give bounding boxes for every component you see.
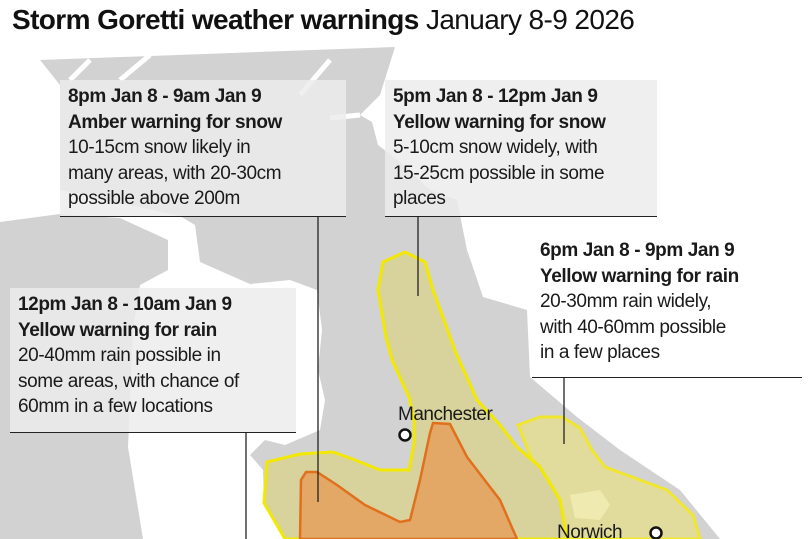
callout: amber snow: 8pm Jan 8 - 9am Jan 9 [68,86,261,107]
callout: yellow rain east: in a few places [540,342,660,363]
callout: yellow snow: 5-10cm snow widely, with [393,137,597,158]
callout: yellow rain west: Yellow warning for rain [18,320,217,340]
callout: yellow snow: places [393,188,446,209]
callout: yellow rain west: some areas, with chance of [18,370,239,392]
callout: yellow rain east [532,234,802,378]
city: Norwich [557,522,662,539]
callout: yellow rain west: 20-40mm rain possible in [18,345,221,366]
callout: yellow rain east: 20-30mm rain widely, [540,291,711,312]
title: Storm Goretti weather warnings January 8-9 2026 [12,4,634,35]
warning: yellow rain east [518,417,700,539]
callout: yellow rain east: 6pm Jan 8 - 9pm Jan 9 [540,240,734,261]
callout: yellow snow: 5pm Jan 8 - 12pm Jan 9 [393,86,598,107]
city: Manchester [398,404,493,440]
sea lochs [70,55,360,118]
callout: amber snow: 10-15cm snow likely in [68,137,250,158]
city: Manchester: Manchester [398,404,493,425]
callout: yellow rain west: 60mm in a few locations [18,396,213,417]
callout: yellow rain west [10,288,296,433]
callout: yellow rain east: with 40-60mm possible [540,316,726,338]
warning: yellow snow [264,252,567,539]
callout: yellow snow: 15-25cm possible in some [393,162,604,184]
callout: amber snow: many areas, with 20-30cm [68,162,281,184]
callout: amber snow [60,80,346,217]
callout: yellow snow: Yellow warning for snow [393,112,606,132]
callout: yellow rain east: Yellow warning for rain [540,266,739,286]
leader lines [246,216,564,539]
callout: amber snow: possible above 200m [68,188,240,209]
callout: yellow snow [385,80,657,217]
warning: amber snow [300,423,517,539]
lighter patch [570,490,610,520]
callout: yellow rain west: 12pm Jan 8 - 10am Jan 9 [18,294,232,315]
land: Ireland [0,214,168,539]
callout: amber snow: Amber warning for snow [68,112,282,132]
